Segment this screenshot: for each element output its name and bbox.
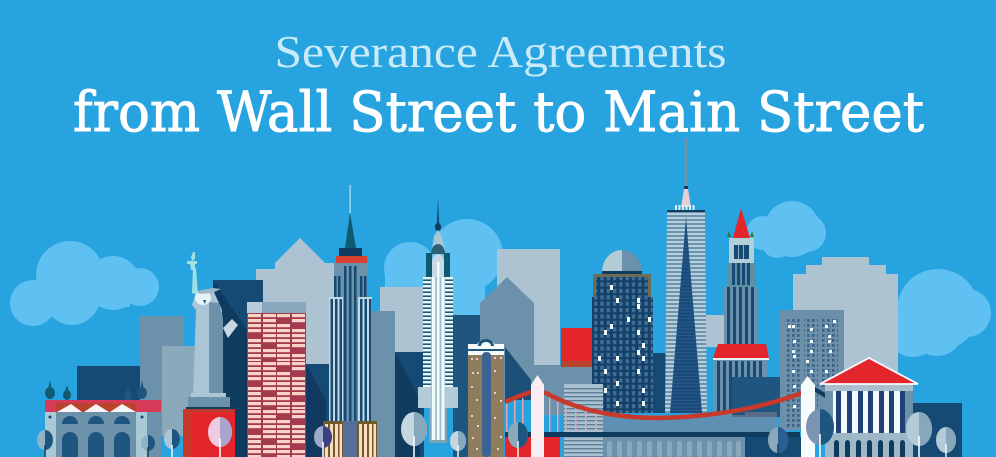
bridge hangers — [506, 397, 596, 432]
Chrysler Building — [418, 197, 458, 443]
classical bank building — [820, 358, 918, 457]
clock tower with red spire — [713, 208, 780, 417]
stepped gray building near bridge — [564, 384, 603, 457]
background towers, right — [653, 257, 962, 457]
bank red pediment — [820, 358, 918, 384]
domed navy tower with lit windows — [592, 250, 653, 413]
palace at far left — [45, 380, 161, 457]
Statue of Liberty — [183, 252, 238, 457]
gray office block with lit windows — [780, 310, 844, 430]
cloud: behind Chrysler building — [384, 219, 503, 318]
base wings of Empire State — [323, 421, 377, 457]
cloud: far right — [886, 269, 991, 357]
cloud: far left — [10, 241, 159, 326]
title: Severance Agreements: Severance Agreements — [274, 27, 726, 77]
trees — [37, 409, 956, 457]
title: from Wall Street to Main Street: from Wall Street to Main Street — [73, 80, 924, 144]
background towers, centre — [372, 249, 593, 457]
red striped office tower — [247, 302, 306, 457]
cloud: behind clock tower — [746, 201, 826, 258]
clock tower base with red roof — [713, 344, 780, 417]
bridge with two towers — [505, 375, 827, 457]
bridge tower left — [531, 375, 544, 457]
pyramid skyscraper with antenna — [665, 138, 707, 413]
bridge tower right — [801, 376, 815, 457]
bridge suspenders — [603, 412, 777, 432]
background towers, left — [77, 238, 334, 457]
narrow brown arched tower — [468, 339, 504, 457]
bridge cables — [505, 392, 802, 418]
statue tablet — [223, 319, 238, 338]
Empire State Building — [323, 185, 377, 457]
